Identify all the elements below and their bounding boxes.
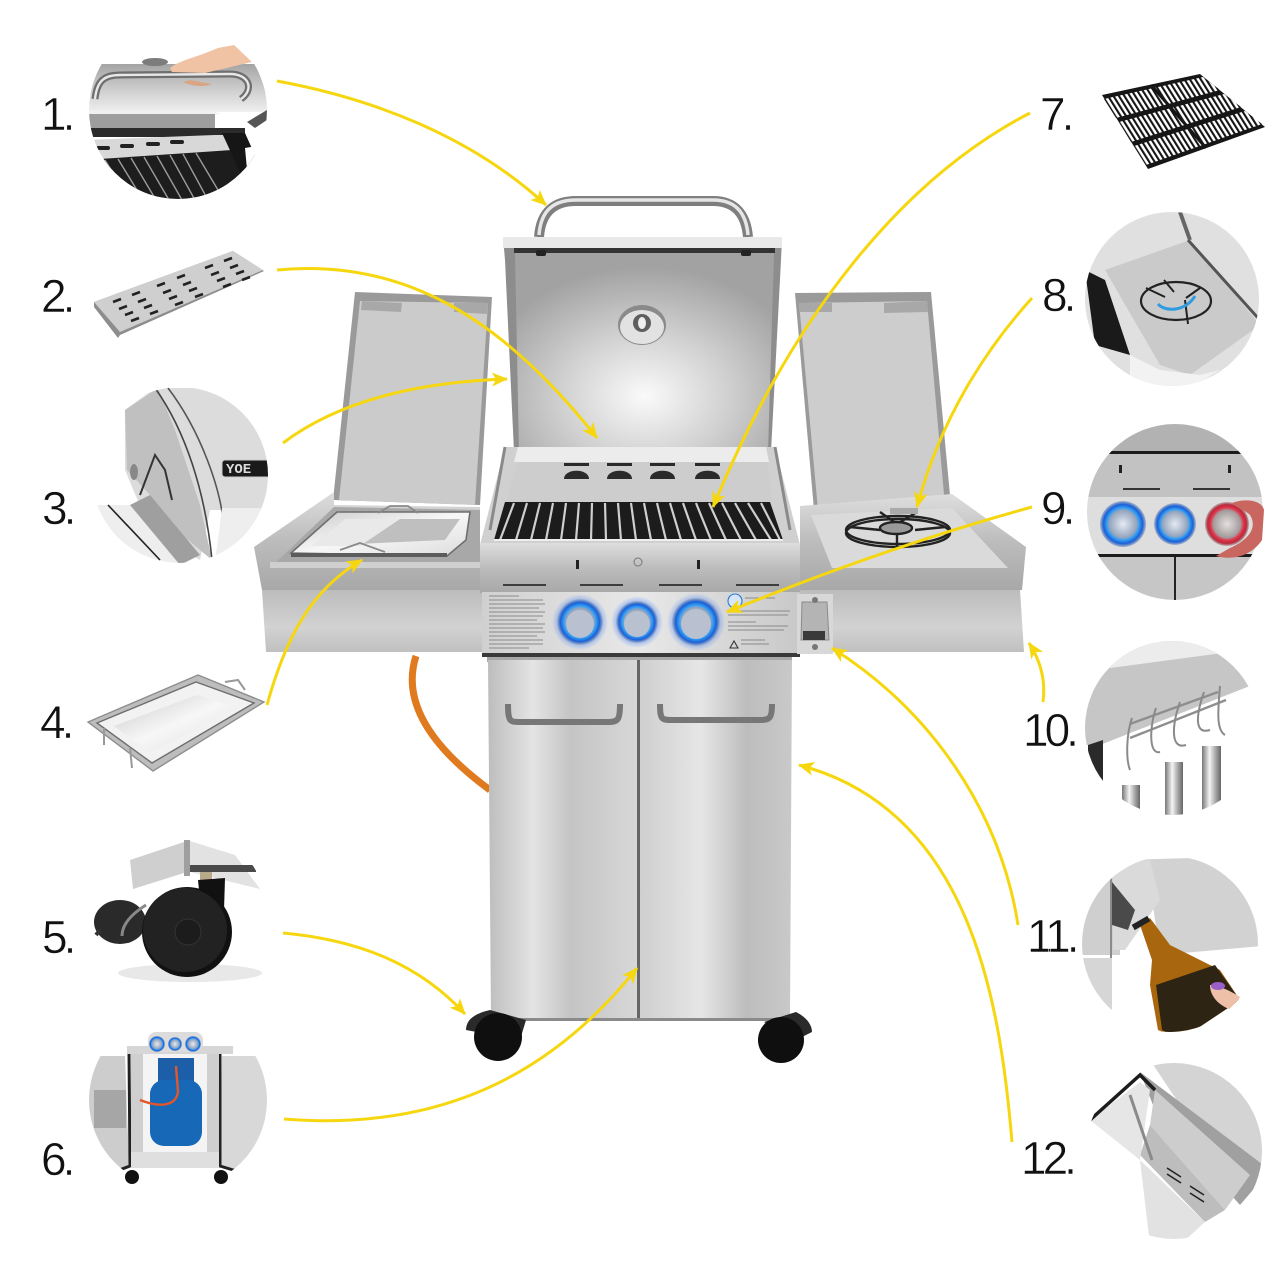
number 7: 7. xyxy=(1040,88,1071,140)
arrow 9 xyxy=(727,507,1032,612)
YOE badge: YOE xyxy=(226,462,251,478)
inset 10: utensil hooks xyxy=(1085,641,1248,815)
left door handle xyxy=(508,704,620,722)
number 8: 8. xyxy=(1042,269,1073,321)
number 9: 9. xyxy=(1041,482,1072,534)
gas hose xyxy=(412,656,490,790)
number 3: 3. xyxy=(42,482,73,534)
beer bottle xyxy=(1132,916,1240,1032)
cabinet xyxy=(487,657,792,1021)
arrow 4 xyxy=(267,560,362,705)
right door handle xyxy=(660,704,772,720)
right caster wheel xyxy=(758,1012,812,1063)
warming rack xyxy=(514,447,769,462)
number 4: 4. xyxy=(40,696,71,748)
arrow 7 xyxy=(713,113,1030,507)
arrow 11 xyxy=(832,648,1018,925)
left cabinet door xyxy=(488,660,638,1018)
left caster wheel xyxy=(466,1010,526,1061)
thermometer xyxy=(618,305,666,345)
firebox with rack and vents xyxy=(480,447,800,545)
drip tray on left shelf xyxy=(270,506,480,568)
lid handle xyxy=(539,200,748,237)
inset 11: bottle opener in use xyxy=(1080,855,1262,1040)
arrow 8 xyxy=(917,298,1032,507)
inset 8: side burner close-up xyxy=(1085,212,1260,400)
inset 2: vented heat plate xyxy=(94,251,264,338)
number 2: 2. xyxy=(41,270,72,322)
arrow 5 xyxy=(283,933,465,1014)
number 12: 12. xyxy=(1021,1132,1073,1184)
mini wheels xyxy=(125,1170,228,1184)
front upper band xyxy=(480,543,800,593)
inset 6: gas bottle in cabinet xyxy=(85,1032,270,1184)
instruction text lines left xyxy=(489,596,545,648)
hand turning knob xyxy=(1216,500,1264,558)
bottle opener xyxy=(797,594,833,654)
number 10: 10. xyxy=(1023,704,1075,756)
burner grate xyxy=(1141,280,1211,324)
left side shelf lid xyxy=(333,292,492,505)
arrow 2 xyxy=(277,268,597,438)
hand xyxy=(142,45,252,86)
right side shelf lid xyxy=(795,292,951,510)
arrow 1 xyxy=(277,81,546,205)
arrow 6 xyxy=(284,968,637,1121)
right side shelf body with side burner xyxy=(800,494,1026,652)
number 6: 6. xyxy=(41,1133,72,1185)
control knob 2 xyxy=(611,596,663,648)
arrow 3 xyxy=(283,379,507,443)
inset 9: illuminated knobs close-up xyxy=(1085,422,1265,607)
cooking grate xyxy=(494,502,783,541)
left side shelf body with drip tray xyxy=(254,492,482,652)
right cabinet door xyxy=(640,660,792,1018)
open lid xyxy=(503,237,782,452)
blue gas bottle xyxy=(140,1058,202,1146)
inset 4: drip tray xyxy=(88,675,264,771)
YOE badge xyxy=(222,460,268,478)
inset 3: lid hinge xyxy=(98,388,268,563)
number 11: 11. xyxy=(1027,910,1076,962)
side burner xyxy=(846,508,950,547)
mini knobs xyxy=(149,1036,201,1052)
vents xyxy=(564,463,720,479)
inset 7: cast iron grates xyxy=(1102,74,1265,169)
inset 5: caster wheel xyxy=(94,840,262,982)
arrow 12 xyxy=(799,765,1012,1142)
number 5: 5. xyxy=(42,911,73,963)
inset 1: lid handle with hand xyxy=(85,45,270,205)
instruction text lines right xyxy=(728,594,790,648)
inset 12: pull-out grease tray xyxy=(1090,1060,1270,1245)
grill: central stainless steel gas grill xyxy=(254,200,1026,1063)
number 1: 1. xyxy=(41,88,72,140)
control knob 3 xyxy=(667,593,725,651)
control knob 1 xyxy=(552,594,608,650)
arrow 10 xyxy=(1029,643,1044,702)
control panel xyxy=(482,592,800,657)
